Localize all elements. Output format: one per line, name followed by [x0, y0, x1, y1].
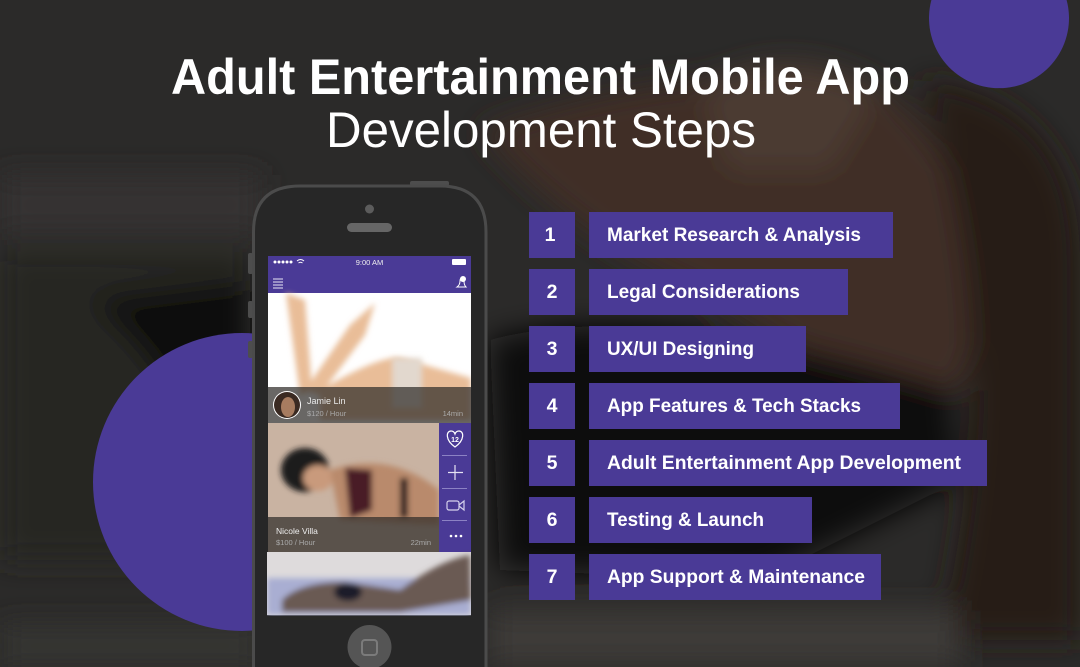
decorative circle: top right [929, 0, 1069, 88]
bell icon [457, 276, 466, 287]
step 7: App Support & Maintenance [607, 566, 865, 588]
step 5: Adult Entertainment App Development [607, 452, 961, 474]
step 3: 3 [547, 338, 558, 360]
step 6: Testing & Launch [607, 509, 764, 531]
title line 2: Development Steps [326, 102, 756, 158]
step 1: Market Research & Analysis [607, 224, 861, 246]
step 1 [529, 212, 893, 258]
rate: $100 / Hour [276, 538, 316, 547]
step 4 [529, 383, 900, 429]
clock: 9:00 AM [356, 258, 383, 267]
app header [268, 256, 471, 293]
avatar [273, 391, 301, 419]
phone mockup [248, 181, 486, 667]
step 7 [529, 554, 881, 600]
step 6: 6 [547, 509, 558, 531]
front camera [365, 204, 374, 214]
step 5 [529, 440, 987, 486]
step 1: 1 [545, 224, 556, 246]
video icon [447, 501, 464, 510]
step 2: Legal Considerations [607, 281, 800, 303]
card overlay [268, 517, 439, 552]
phone body [254, 186, 486, 667]
step 2 [529, 269, 848, 315]
photo card 1 [268, 293, 471, 423]
step 3 [529, 326, 806, 372]
steps list [529, 212, 987, 600]
heart icon: 12 [451, 437, 459, 444]
speaker [347, 223, 392, 232]
card overlay [268, 387, 471, 423]
step 5: 5 [547, 452, 558, 474]
rate: $120 / Hour [307, 409, 347, 418]
title line 1: Adult Entertainment Mobile App [171, 49, 910, 105]
plus icon [448, 465, 463, 480]
abstract photo shapes [286, 293, 471, 420]
time: 22min [411, 538, 431, 547]
step 4: App Features & Tech Stacks [607, 395, 861, 417]
menu icon [273, 279, 283, 288]
wifi icon [297, 260, 304, 263]
photo card 3 [267, 552, 471, 615]
step 4: 4 [547, 395, 558, 417]
status dots [274, 260, 292, 264]
name: Jamie Lin [307, 396, 346, 406]
name: Nicole Villa [276, 526, 318, 536]
home button [348, 625, 392, 667]
photo card 2 [268, 423, 439, 552]
step 7: 7 [547, 566, 557, 588]
more icon [450, 535, 462, 537]
side action panel [439, 423, 471, 552]
phone screen [267, 256, 471, 615]
step 3: UX/UI Designing [607, 338, 754, 360]
step 2: 2 [547, 281, 558, 303]
decorative circle: behind phone [93, 333, 391, 631]
time: 14min [443, 409, 463, 418]
battery [452, 259, 466, 265]
phone buttons [248, 181, 449, 358]
step 6 [529, 497, 812, 543]
title [171, 49, 910, 158]
